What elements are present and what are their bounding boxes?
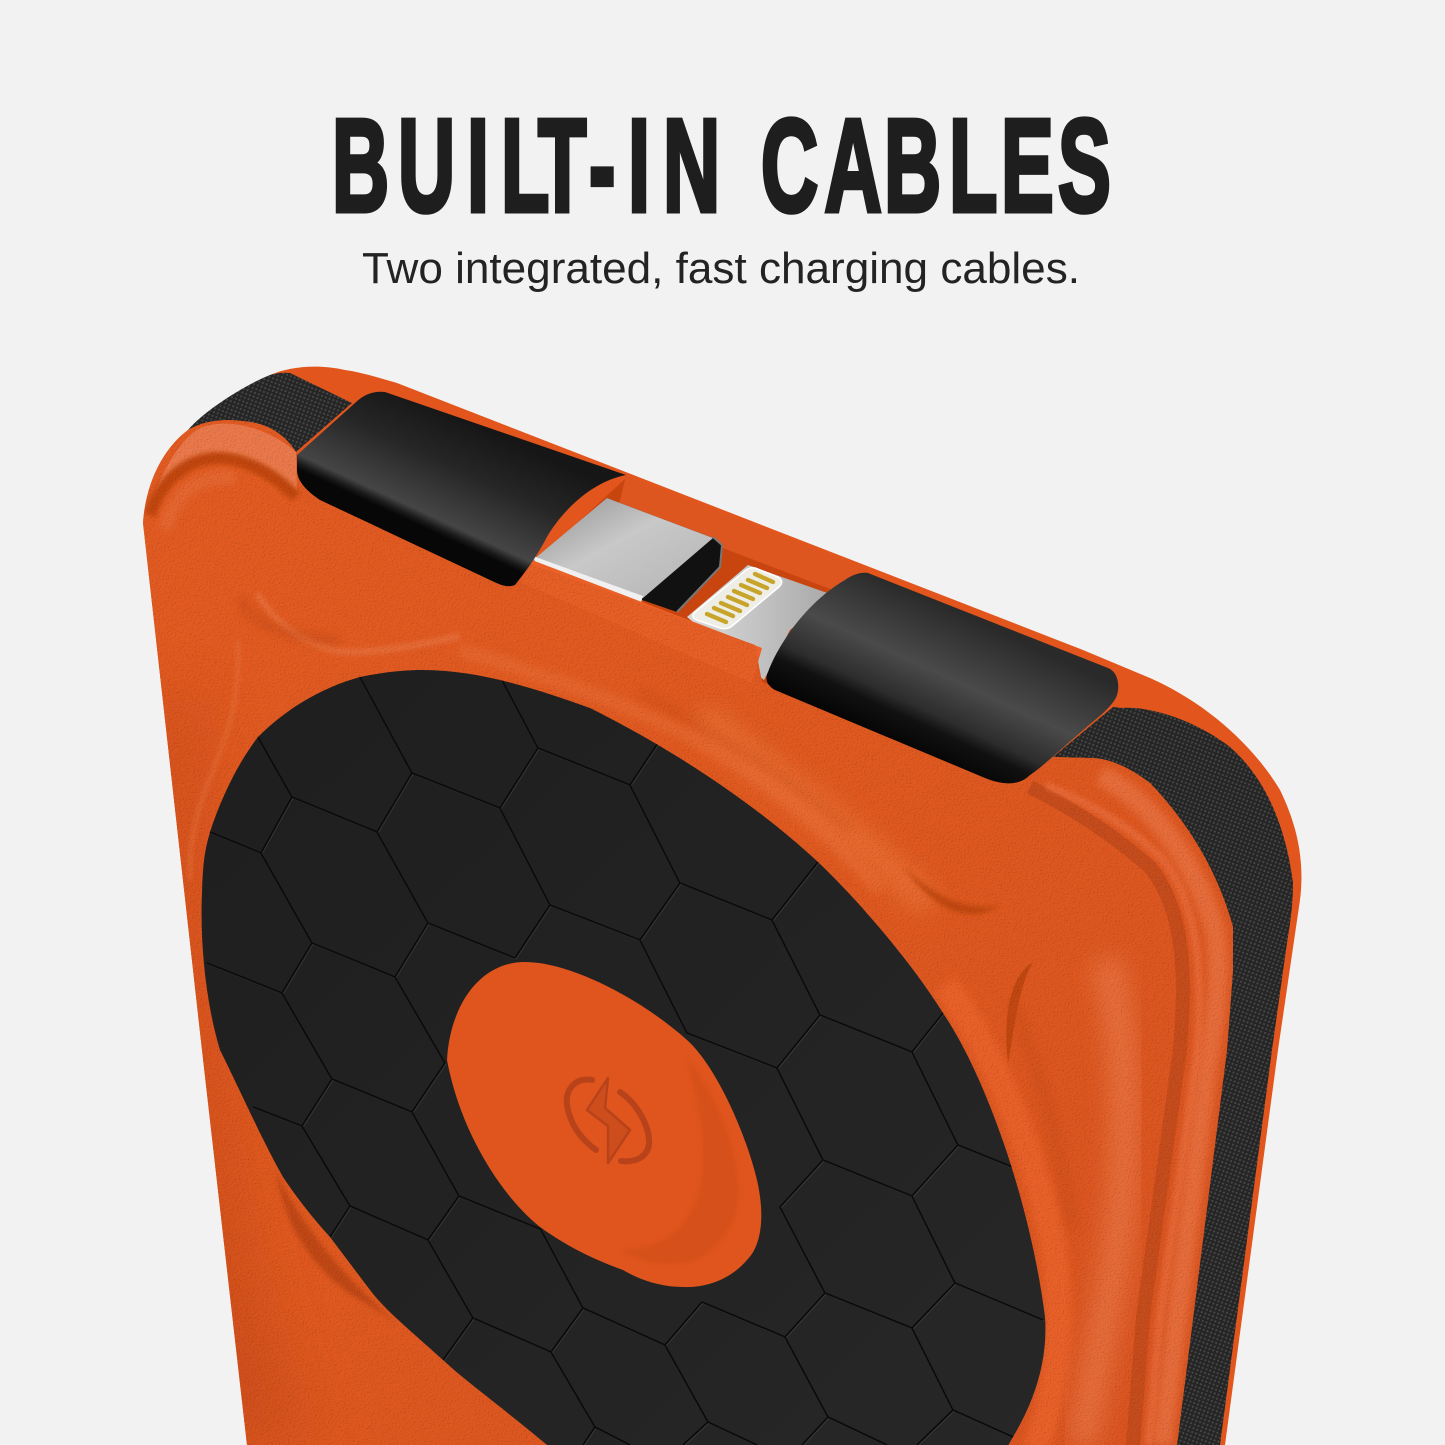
top-left dark step <box>150 458 296 515</box>
highlight on mid rib <box>1082 960 1124 1445</box>
lower-left disc boss <box>276 1176 387 1316</box>
black fabric band, right side <box>1053 707 1293 1445</box>
orange outer shell <box>143 367 1301 1445</box>
cable channel floor <box>510 478 865 690</box>
leather grain texture <box>143 420 1233 1445</box>
left arc <box>567 1080 596 1150</box>
title: BUILT-IN CABLES <box>332 92 1111 240</box>
top-left pale lip <box>155 424 297 492</box>
face shading and moulded ridges <box>150 424 1218 1445</box>
bright band beside disc <box>945 985 1058 1445</box>
USB-C connector <box>533 498 722 612</box>
pale outer rib <box>1100 775 1218 1445</box>
power bank device <box>140 366 1310 1445</box>
pad recessed crescent <box>620 1056 739 1264</box>
icon: charging logo <box>567 1078 649 1163</box>
crescent crease <box>1006 962 1033 1065</box>
right black cable cap <box>766 573 1118 783</box>
right arc <box>620 1092 649 1161</box>
honeycomb lines <box>207 677 1044 1445</box>
gold pins <box>707 574 773 622</box>
upper-right valley wedge <box>909 872 996 916</box>
infographic canvas <box>143 116 1302 1445</box>
Lightning connector <box>687 565 833 680</box>
orange front face <box>143 420 1233 1445</box>
left black cable cap <box>297 392 626 586</box>
subtitle: Two integrated, fast charging cables. <box>362 244 1080 293</box>
orange lip between connectors <box>520 560 762 683</box>
contact plate <box>693 568 782 629</box>
recessed rim channel <box>1030 787 1183 1445</box>
black hexagon wireless charging disc <box>202 670 1045 1445</box>
ridge above disc <box>460 650 880 890</box>
lightning bolt <box>587 1078 630 1163</box>
valley around disc, upper left <box>257 593 460 652</box>
channel back wall <box>618 476 868 592</box>
center orange magnet pad <box>447 962 761 1287</box>
black fabric strap, top left <box>188 373 352 452</box>
